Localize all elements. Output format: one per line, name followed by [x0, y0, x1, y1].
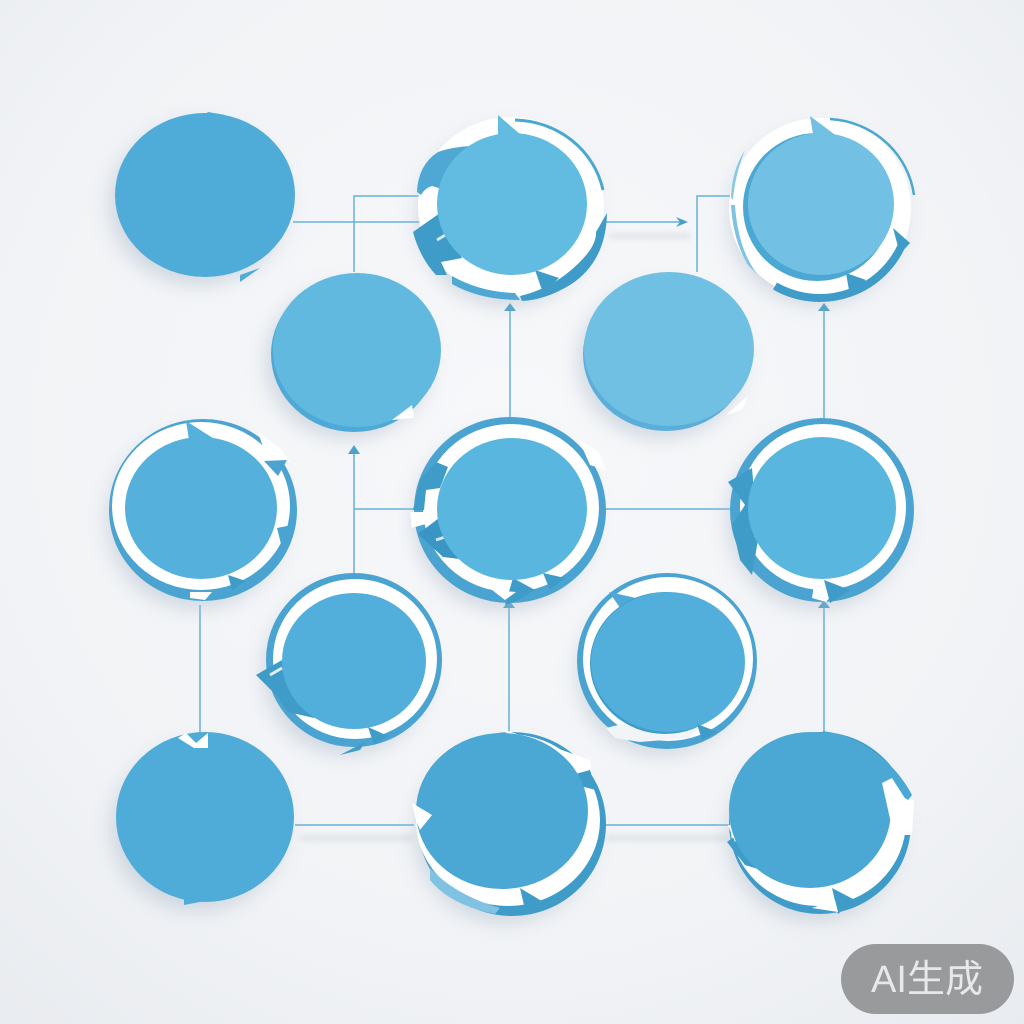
badge: AI generated: AI生成 [871, 959, 983, 1001]
node: lower middle left [256, 573, 442, 755]
node: upper middle left [266, 273, 441, 438]
node: bottom centre [412, 728, 606, 922]
node: upper middle right [578, 272, 754, 438]
node: top left [110, 112, 295, 284]
node: bottom right [727, 731, 914, 920]
node: top right [729, 116, 914, 304]
node: top centre [413, 115, 607, 306]
node: centre [410, 417, 606, 610]
connector lines [200, 196, 830, 838]
node: middle right [728, 418, 914, 608]
badge: AI generated [841, 944, 1014, 1014]
node: middle left [108, 419, 297, 608]
node: lower middle right [577, 573, 757, 754]
node: bottom left [112, 732, 294, 910]
